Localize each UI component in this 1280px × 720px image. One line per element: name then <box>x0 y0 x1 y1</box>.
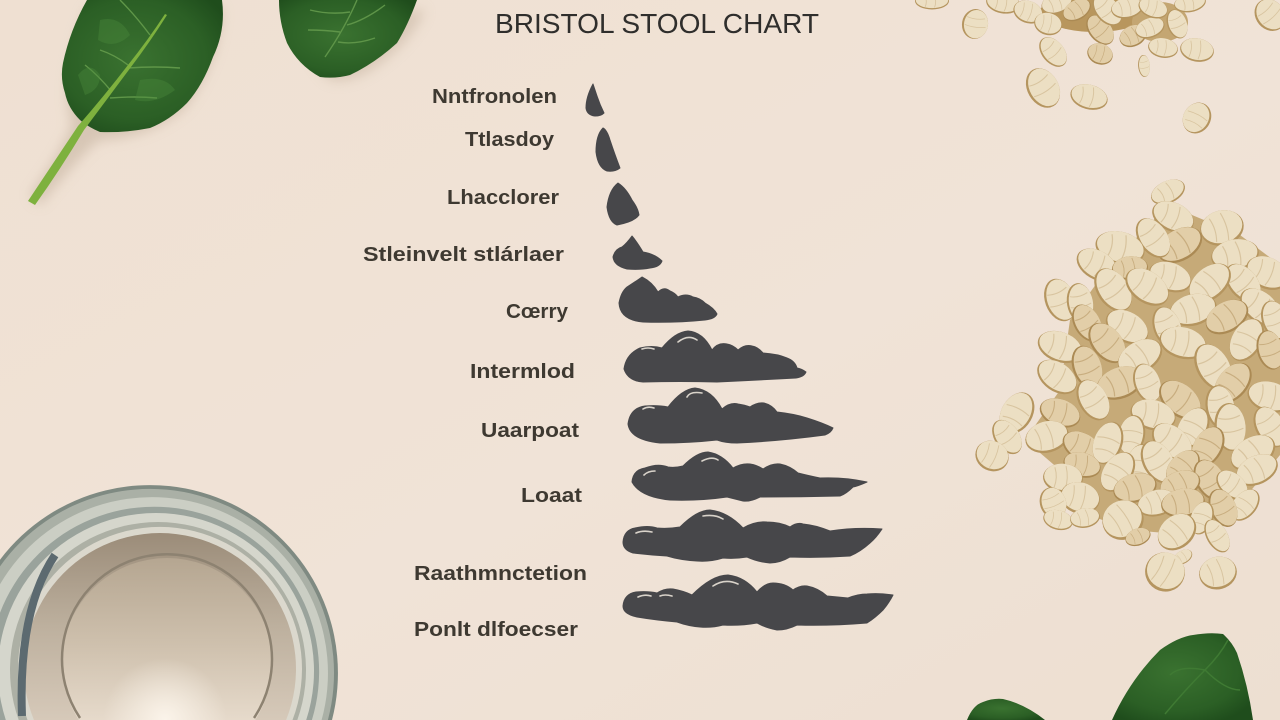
icon: oat flakes top right <box>915 0 1280 134</box>
icon: spinach leaf bottom right <box>1112 633 1253 720</box>
chart labels: Nntfronolen <box>432 86 557 108</box>
chart labels <box>363 86 587 641</box>
title: BRISTOL STOOL CHART <box>495 8 819 39</box>
chart labels: Cœrry <box>506 301 569 323</box>
icon: spinach leaf bottom centre <box>967 699 1045 720</box>
icon: spinach leaf top left <box>28 0 223 205</box>
icon: glass of water <box>0 485 338 720</box>
chart labels: Ttlasdoy <box>465 129 555 151</box>
chart labels: Stleinvelt stlárlaer <box>363 244 564 266</box>
icon: oat flake pile right <box>975 179 1280 592</box>
chart labels: Lhacclorer <box>447 187 559 209</box>
chart: stool shapes <box>586 84 893 630</box>
chart labels: Loaat <box>521 485 582 507</box>
icon: spinach leaf top centre <box>279 0 425 81</box>
chart labels: Uaarpoat <box>481 420 579 442</box>
chart labels: Intermlod <box>470 361 575 383</box>
chart labels: Raathmnctetion <box>414 563 587 585</box>
chart labels: Ponlt dlfoecser <box>414 619 578 641</box>
